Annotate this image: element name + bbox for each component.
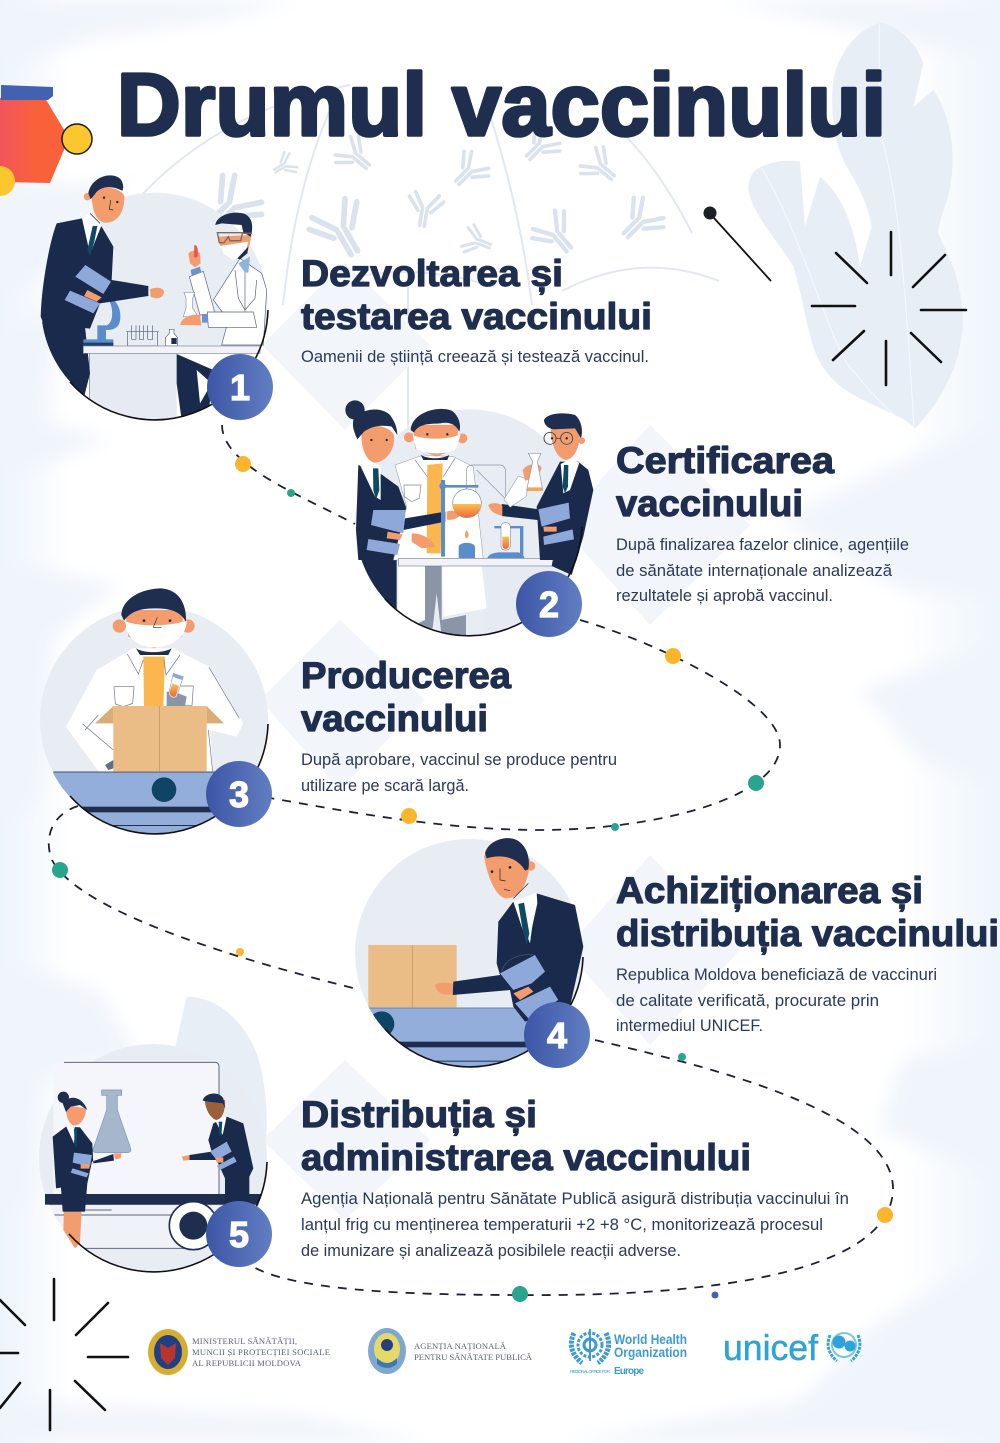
- step 2 circle edge: [385, 527, 582, 636]
- step 1 text: testarea vaccinului: [301, 296, 652, 337]
- logo: ministry: MINISTERUL SĂNĂTĂȚII,: [192, 1336, 297, 1347]
- step 3 circle edge: [70, 724, 268, 834]
- logo: ministry: [148, 1329, 330, 1375]
- illustration 5: presentation screen: [39, 996, 267, 1271]
- illustration 2: certification team: [345, 400, 593, 638]
- logo: WHO Europe: Europe: [614, 1366, 644, 1377]
- step 2 text: rezultatele și aprobă vaccinul.: [616, 587, 833, 605]
- step 3 text: După aprobare, vaccinul se produce pentru: [301, 751, 617, 769]
- pin decoration: [704, 206, 771, 281]
- step 3 text: utilizare pe scară largă.: [301, 777, 469, 795]
- badge 4: 4: [547, 1015, 567, 1056]
- logo: ministry: MUNCII ȘI PROTECȚIEI SOCIALE: [192, 1347, 330, 1358]
- badge 3: [206, 761, 272, 827]
- leaves top right: [748, 23, 963, 428]
- logo: unicef: unicef: [723, 1327, 819, 1368]
- burst decoration bottom left: [0, 1279, 128, 1430]
- step 1 text: Oamenii de știință creează și testează vaccinul.: [301, 348, 649, 366]
- step 1 text: [301, 253, 652, 366]
- illustration 3: production worker: [40, 588, 268, 835]
- logo: WHO Europe: Organization: [614, 1345, 687, 1360]
- step 4 text: distribuția vaccinului: [616, 913, 999, 955]
- step 4 text: Achiziționarea și: [616, 870, 923, 912]
- umbrella with antibodies (background): [138, 85, 719, 430]
- step 4 text: Republica Moldova beneficiază de vaccinuri: [616, 966, 937, 984]
- step 4 text: [616, 870, 999, 1035]
- step 5 text: de imunizare și analizează posibilele reacții adverse.: [301, 1242, 681, 1260]
- logo: WHO Europe: World Health: [614, 1332, 687, 1347]
- step 5 text: [301, 1094, 849, 1260]
- title: Drumul vaccinului: [117, 55, 886, 154]
- badge 2: [516, 571, 582, 637]
- logo: WHO Europe: REGIONAL OFFICE FOR: [570, 1369, 611, 1374]
- step 2 text: După finalizarea fazelor clinice, agențiile: [616, 536, 909, 554]
- burst decoration top right: [812, 232, 966, 385]
- dashed journey path: [49, 425, 893, 1295]
- badge 3: 3: [229, 774, 249, 815]
- badge 5: [206, 1201, 272, 1267]
- badge 2: 2: [539, 584, 559, 625]
- step 2 text: de sănătate internaționale analizează: [616, 562, 893, 580]
- pale diamonds behind the steps: [260, 262, 750, 1220]
- step 3 text: vaccinului: [301, 698, 488, 739]
- badge 5: 5: [229, 1214, 249, 1255]
- path dots: [52, 456, 893, 1302]
- step 5 text: Agenția Națională pentru Sănătate Publică asigură distribuția vaccinului în: [301, 1190, 849, 1208]
- step 4 text: intermediul UNICEF.: [616, 1017, 763, 1035]
- step 5 text: lanțul frig cu menținerea temperaturii +2 +8 °C, monitorizează procesul: [301, 1216, 823, 1234]
- illustration 4: distribution official: [353, 838, 587, 1071]
- badge 1: [207, 354, 273, 420]
- step 5 circle edge: [69, 1162, 267, 1272]
- logo: public health agency: [368, 1328, 533, 1374]
- step 5 text: administrarea vaccinului: [301, 1137, 751, 1178]
- step 1 text: Dezvoltarea și: [301, 253, 563, 294]
- step 1 circle edge: [70, 310, 268, 420]
- hexagon decoration top left: [0, 85, 92, 196]
- illustration 1: scientist and official: [37, 175, 277, 425]
- logo: WHO Europe: [570, 1329, 687, 1377]
- step 4 circle edge: [385, 957, 583, 1067]
- logo: ministry: AL REPUBLICII MOLDOVA: [192, 1358, 302, 1368]
- step 5 text: Distribuția și: [301, 1094, 537, 1136]
- step 3 text: Producerea: [301, 655, 511, 696]
- step 3 text: [301, 655, 617, 795]
- step 2 text: [616, 440, 909, 605]
- badge 1: 1: [230, 367, 250, 408]
- step 4 text: de calitate verificată, procurate prin: [616, 992, 879, 1010]
- badge 4: [524, 1002, 590, 1068]
- logo: public health agency: PENTRU SĂNĂTATE PUBLICĂ: [414, 1352, 533, 1362]
- logo: public health agency: AGENȚIA NAȚIONALĂ: [414, 1341, 507, 1352]
- step 2 text: Certificarea: [616, 440, 834, 481]
- step 2 text: vaccinului: [616, 483, 803, 524]
